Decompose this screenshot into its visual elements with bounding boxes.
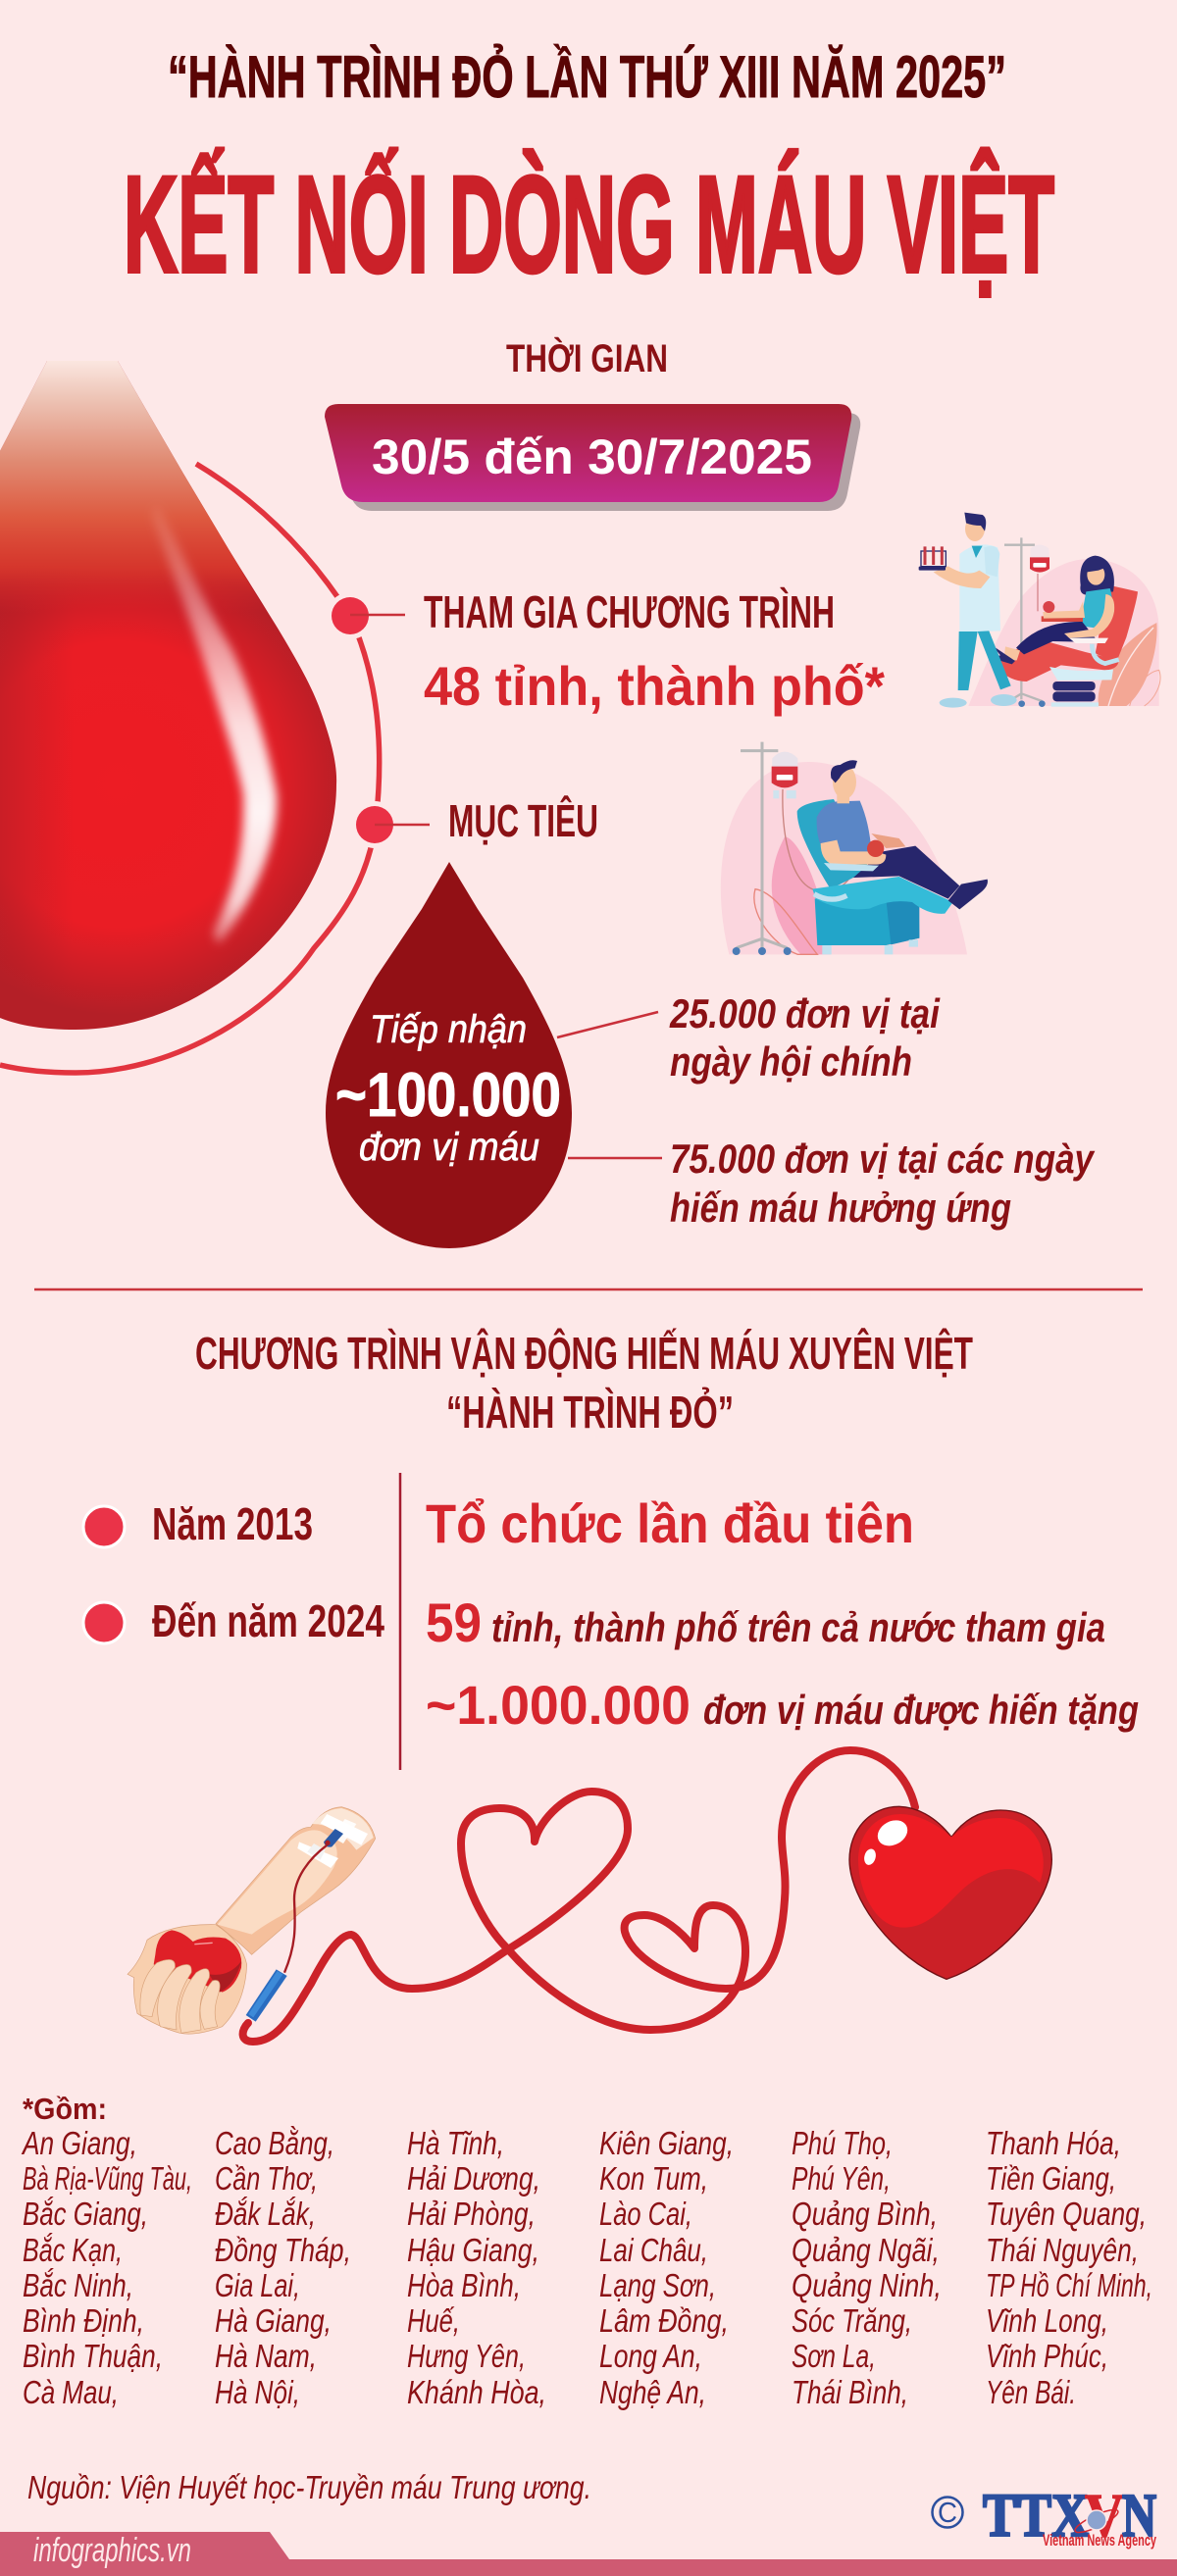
column 6: Thái Nguyên, [986,2232,1139,2268]
column 6: Tiền Giang, [986,2160,1116,2197]
logo TTXVN [932,2483,1156,2550]
breakdown 1: ngày hội chính [670,1038,912,1085]
column 5 [792,2125,942,2410]
column 4: Lạng Sơn, [599,2267,716,2303]
dark drop with target: đơn vị máu [359,1126,539,1169]
column 5: Sơn La, [792,2338,876,2374]
column 4: Lâm Đồng, [599,2302,729,2339]
stat million: ~1.000.000 [426,1674,691,1736]
bullet 2024 [83,1595,384,1646]
first edition: Tổ chức lần đầu tiên [426,1492,914,1554]
bag [1030,544,1049,573]
column 2: Hà Giang, [215,2302,332,2339]
column 3: Hòa Bình, [407,2267,521,2303]
column 1: An Giang, [21,2125,137,2161]
source: Nguồn: Viện Huyết học-Truyền máu Trung ương. [27,2469,591,2505]
column 5: Phú Yên, [792,2160,891,2197]
column 1: Cà Mau, [23,2374,119,2410]
column 2: Hà Nam, [215,2338,317,2374]
stat million [426,1674,1139,1736]
provinces list [21,2092,1152,2410]
orbit arc [0,464,380,1073]
column 1: Bắc Giang, [23,2196,148,2232]
section heading [195,1328,973,1438]
marker: target [351,801,430,848]
dark drop with target [326,862,572,1248]
connector 1 [557,1012,658,1037]
logo TTXVN: TTX [983,2483,1089,2550]
icon: big heart [849,1806,1051,1979]
dark drop with target: ~100.000 [335,1061,561,1130]
column 6: Thanh Hóa, [986,2125,1121,2161]
column 1: Bà Rịa-Vũng Tàu, [23,2160,192,2197]
section heading: “HÀNH TRÌNH ĐỎ” [446,1387,734,1438]
column 1 [21,2125,192,2410]
column 6: Yên Bái. [986,2374,1076,2410]
stat 59 [426,1591,1105,1653]
dark drop with target: Tiếp nhận [370,1008,527,1051]
column 4: Kiên Giang, [599,2125,734,2161]
column 3: Hà Tĩnh, [407,2125,504,2161]
column 2 [215,2125,351,2410]
breakdown 2 [670,1136,1096,1231]
iv pole [737,742,788,948]
time label: THỜI GIAN [506,335,668,380]
column 2: Gia Lai, [215,2267,300,2303]
column 4: Lai Châu, [599,2232,708,2268]
logo TTXVN: N [1122,2483,1156,2550]
bullet 2013: Năm 2013 [152,1498,313,1549]
connector 2 [568,1157,662,1159]
logo TTXVN: C [938,2498,957,2529]
column 2: Cần Thơ, [215,2160,318,2197]
chair [1096,585,1138,662]
stat 59: 59 [426,1591,482,1653]
column 3 [407,2125,546,2410]
doctor [965,517,985,541]
column 3: Huế, [407,2302,460,2339]
divider [34,1288,1143,1290]
value: provinces: 48 tỉnh, thành phố* [424,655,885,717]
column 3: Khánh Hòa, [407,2374,546,2410]
column 3: Hải Phòng, [407,2196,536,2232]
column 2: Đắk Lắk, [215,2196,316,2232]
column 6 [986,2125,1152,2410]
iv pole [1004,537,1042,703]
icon: arm with stress ball [128,1807,376,2034]
column 5: Quảng Ninh, [792,2267,942,2303]
column 1: Bình Thuận, [23,2338,163,2374]
column 4: Nghệ An, [599,2374,706,2410]
column 5: Phú Thọ, [792,2125,893,2161]
column 5: Sóc Trăng, [792,2302,912,2339]
column 4: Lào Cai, [599,2196,692,2232]
date badge [325,404,860,511]
bullet 2024: Đến năm 2024 [152,1595,384,1646]
man [853,846,959,899]
logo TTXVN: V [1085,2483,1124,2550]
date badge: 30/5 đến 30/7/2025 [372,429,812,484]
footer bar [0,2532,1177,2576]
icon: doctor and female donor [919,513,1160,708]
column 2: Cao Bằng, [215,2125,334,2161]
icon: male donor [721,742,988,955]
column 2: Hà Nội, [215,2374,300,2410]
big blood drop [0,361,336,1030]
footer bar: infographics.vn [33,2532,191,2569]
column 4: Kon Tum, [599,2160,708,2197]
column 5: Quảng Ngãi, [792,2232,940,2268]
column 1: Bắc Ninh, [23,2267,133,2303]
breakdown 1: 25.000 đơn vị tại [669,990,941,1036]
heading: target: MỤC TIÊU [448,795,598,846]
column 3: Hưng Yên, [407,2338,526,2374]
column 6: Vĩnh Long, [986,2302,1108,2339]
list heading: *Gồm: [23,2092,107,2126]
bag [772,752,797,787]
bullet 2013 [83,1498,313,1549]
woman [1080,556,1114,595]
column 4: Long An, [599,2338,702,2374]
blood tube hearts [243,1750,915,2042]
breakdown 1 [669,990,941,1085]
chair [797,799,870,889]
heading: participants: THAM GIA CHƯƠNG TRÌNH [424,586,835,637]
breakdown 2: 75.000 đơn vị tại các ngày [670,1136,1096,1182]
column 5: Quảng Bình, [792,2196,938,2232]
column 3: Hậu Giang, [407,2232,539,2268]
breakdown 2: hiến máu hưởng ứng [670,1185,1011,1231]
column 1: Bình Định, [23,2302,144,2339]
column 1: Bắc Kạn, [23,2232,123,2268]
column 2: Đồng Tháp, [215,2232,351,2268]
column 5: Thái Bình, [792,2374,908,2410]
timeline rule [399,1473,401,1770]
column 4 [599,2125,734,2410]
column 6: Vĩnh Phúc, [986,2338,1108,2374]
column 3: Hải Dương, [407,2160,540,2197]
marker: participants [327,592,405,639]
